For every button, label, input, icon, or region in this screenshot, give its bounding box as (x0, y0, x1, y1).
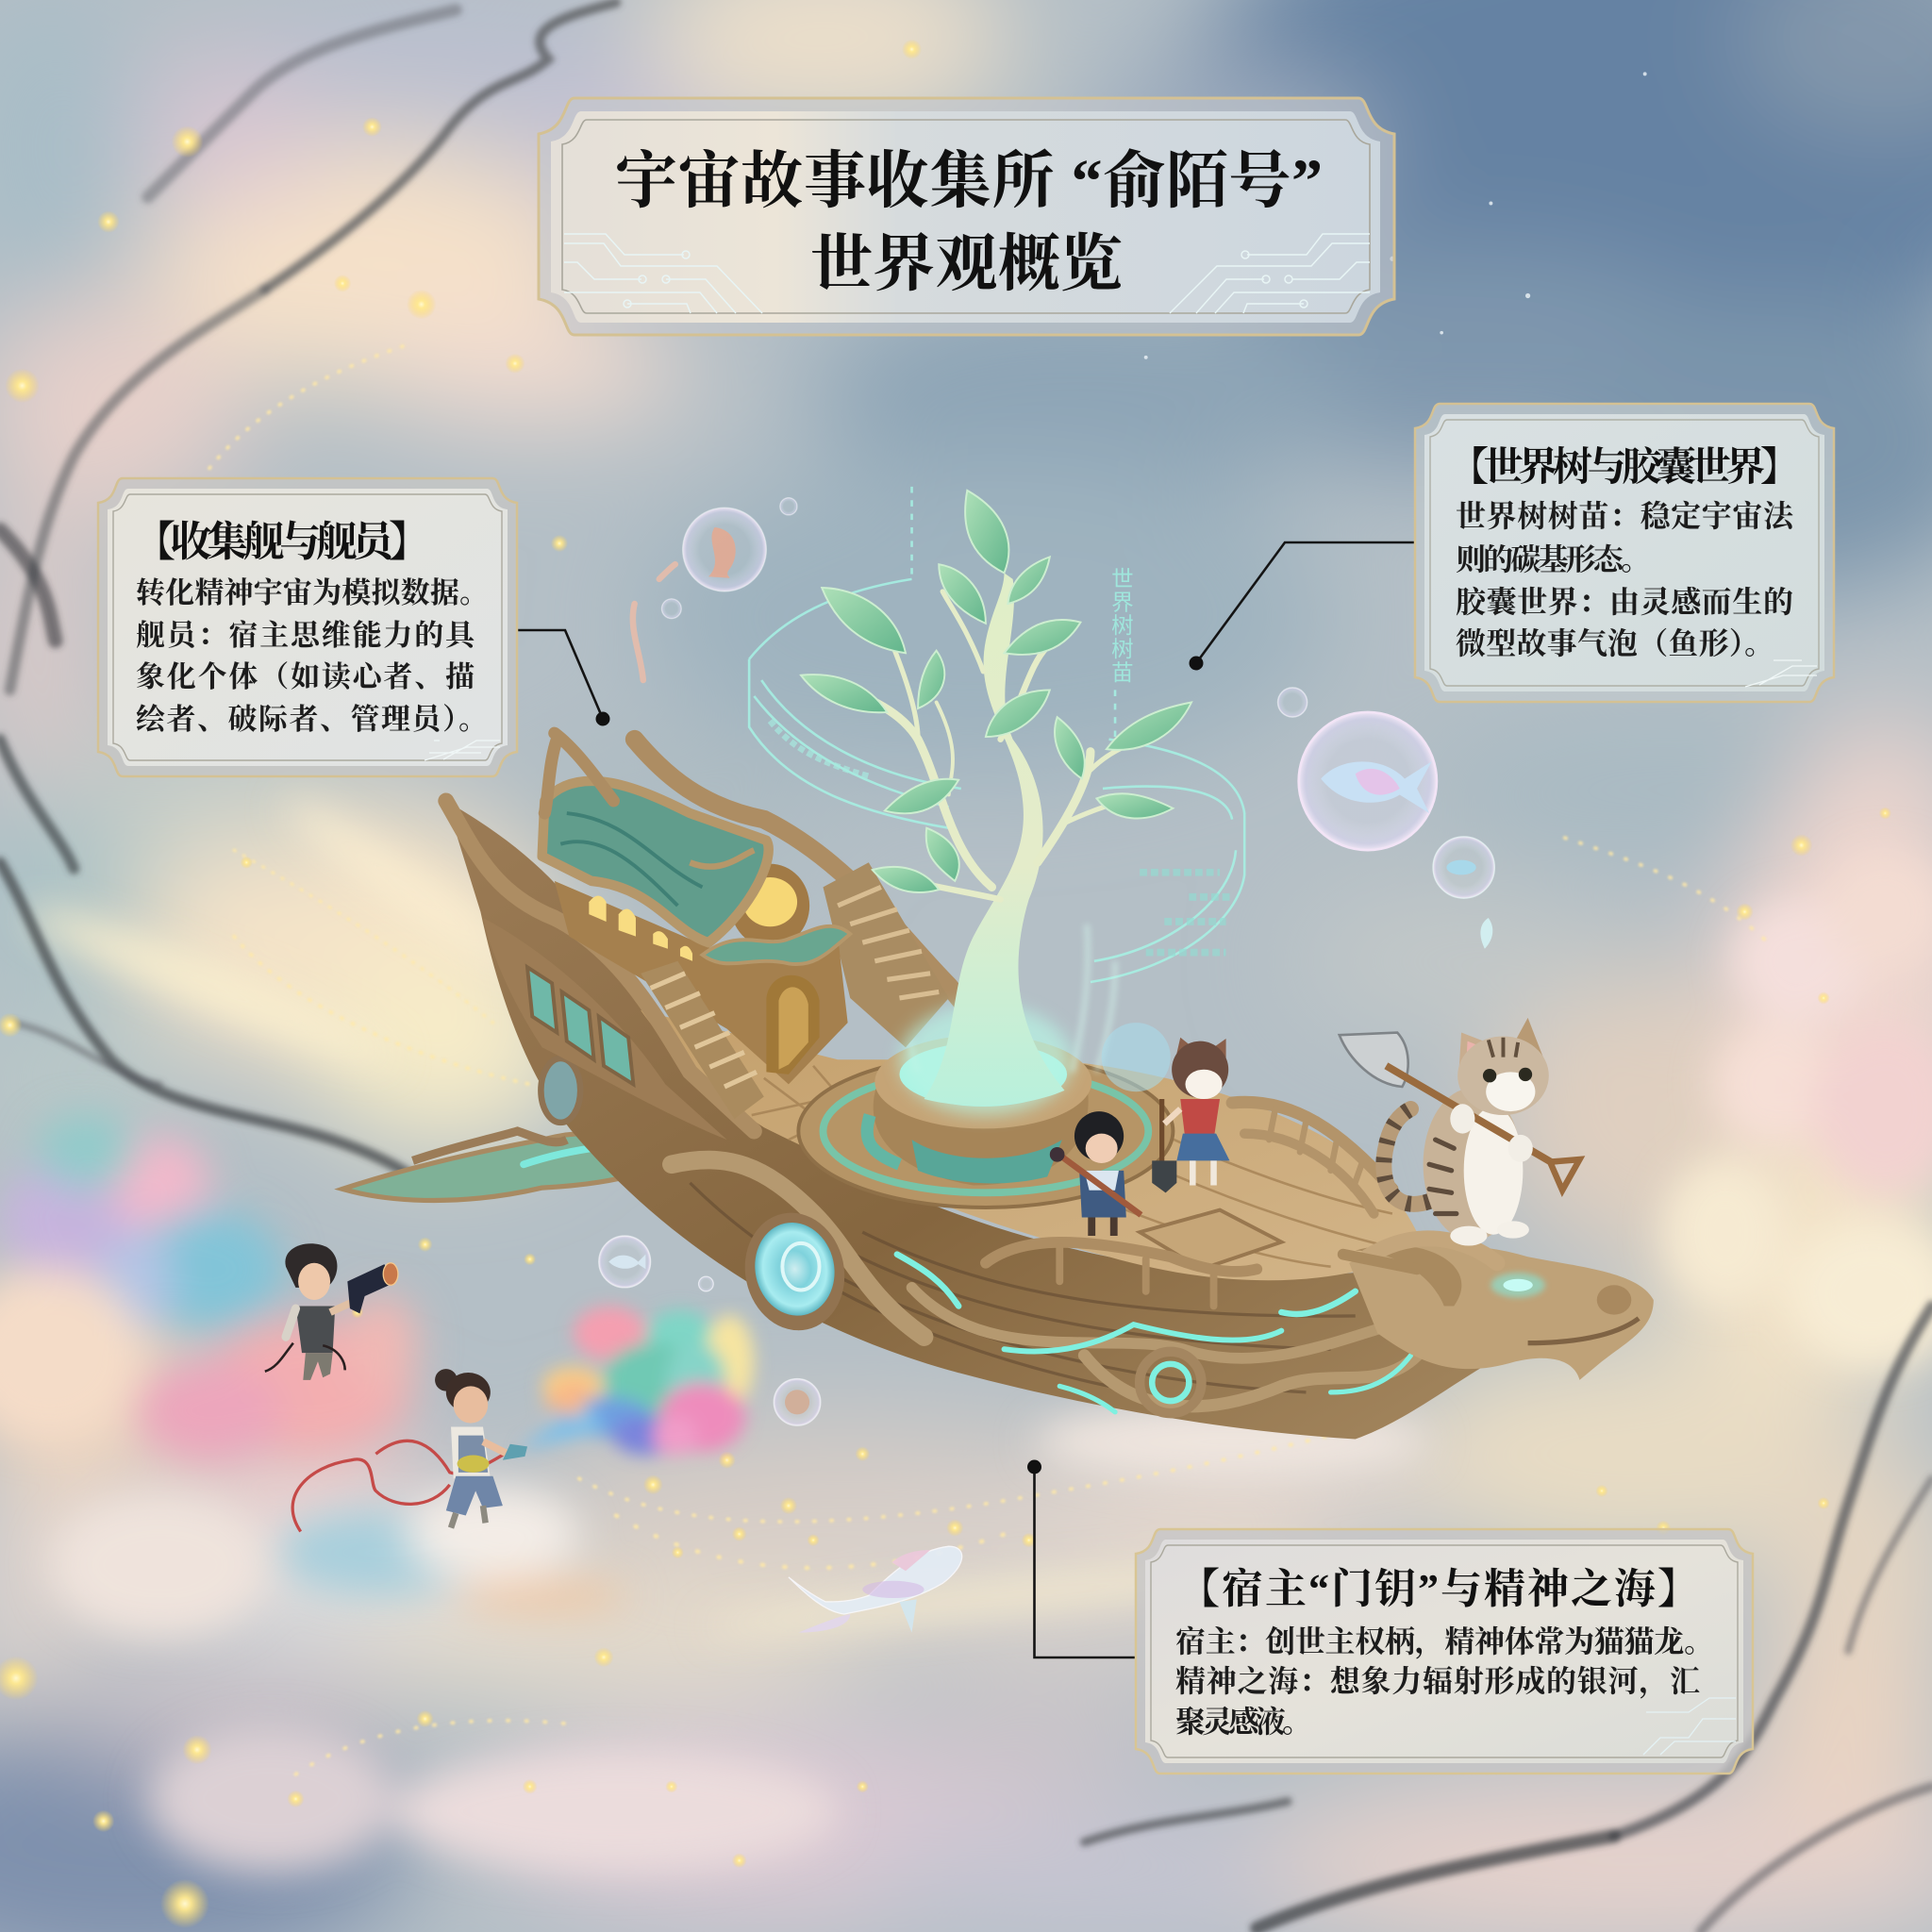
tail fin (342, 1131, 690, 1200)
body text (1456, 492, 1796, 663)
crew: boy with capture gun (265, 1243, 398, 1380)
body text: 聚灵感液。 (1175, 1698, 1312, 1741)
body text: 宿主：创世主权柄，精神体常为猫猫龙。 (1175, 1618, 1714, 1661)
body text (1175, 1618, 1714, 1741)
floating bubbles left (633, 498, 797, 680)
heading: 【宿主“门钥”与精神之海】 (1178, 1566, 1699, 1612)
glowing cyan veins (897, 1255, 1411, 1412)
golden dust trails (209, 345, 1774, 1774)
body text: 精神之海：想象力辐射形成的银河，汇 (1175, 1657, 1700, 1701)
frame (98, 478, 517, 776)
hull swirl emblem (1140, 1352, 1201, 1413)
porch roof (702, 926, 850, 964)
front rail (986, 1242, 1257, 1306)
body text (136, 569, 489, 738)
title plate (551, 111, 1380, 323)
title line one: 宇宙故事收集所 “俞陌号” (615, 147, 1323, 216)
stair left (641, 961, 764, 1119)
deck hatch (1140, 1210, 1281, 1269)
heading: 【世界树与胶囊世界】 (1449, 445, 1800, 490)
hull planks (690, 1183, 1356, 1392)
title line two: 世界观概览 (810, 230, 1123, 299)
hologram label: sapling: 世界树树苗 (1107, 567, 1139, 684)
rainbow smoke plume (518, 1306, 754, 1456)
lower bubbles (599, 1236, 821, 1425)
body text: 绘者、破际者、管理员）。 (136, 695, 488, 738)
plate (1424, 414, 1824, 691)
deck (641, 1010, 1417, 1280)
stern windows (527, 967, 633, 1084)
frame (1136, 1529, 1753, 1774)
cabin arched door (766, 975, 820, 1074)
cabin walls (555, 881, 848, 1084)
hologram rings with tree data (749, 487, 1244, 982)
bow rail (1232, 1102, 1392, 1214)
panel: host door key and sea of mind (1136, 1529, 1753, 1774)
title frame (539, 98, 1394, 335)
body text: 胶囊世界：由灵感而生的 (1456, 578, 1793, 622)
leaves (801, 491, 1191, 892)
upper rail horn (635, 740, 998, 1047)
plate (108, 489, 508, 766)
roof horn (544, 733, 613, 813)
title circuit traces (564, 234, 1370, 313)
body text: 转化精神宇宙为模拟数据。 (136, 569, 489, 611)
ghost fish (789, 1546, 962, 1633)
title panel (539, 98, 1394, 335)
crew: girl with rainbow sprayer (292, 1369, 527, 1532)
circuit corner (425, 741, 500, 760)
dragon figurehead (1343, 1239, 1654, 1380)
pedestal with glowing pool (798, 1035, 1173, 1208)
leader line: crew panel to ship (517, 630, 609, 726)
body text: 象化个体（如读心者、描 (136, 653, 475, 695)
plate (1145, 1540, 1743, 1763)
ship: flying wooden dragon ark (342, 491, 1654, 1440)
shovel (1340, 1033, 1579, 1191)
soft pastel puffs lower left (0, 789, 1932, 1873)
circuit corner (1745, 660, 1817, 687)
leader line: tree panel to sapling (1189, 542, 1415, 670)
stair right (823, 862, 949, 1047)
body text: 则的碳基形态。 (1456, 536, 1651, 579)
fish bubbles right (1277, 688, 1494, 949)
leader line: host panel to sea (1027, 1460, 1136, 1657)
circuit corner (1643, 1698, 1736, 1755)
rear orb small (541, 1058, 580, 1123)
cyan mist rising (908, 924, 1115, 1072)
panel: collector ship and crew (98, 478, 517, 776)
rear thruster orb (734, 1204, 856, 1340)
deck planks (752, 1066, 1392, 1267)
world tree sapling (801, 491, 1191, 1115)
hull (446, 801, 1528, 1440)
cabin windows (589, 896, 692, 961)
stern top rail (446, 801, 754, 1131)
glowing bubble behind deck (1102, 1023, 1171, 1091)
body text: 微型故事气泡（鱼形）。 (1456, 620, 1774, 663)
body text: 世界树树苗：稳定宇宙法 (1456, 492, 1796, 536)
stern wall (483, 918, 727, 1140)
twisting vines on hull (672, 1160, 1417, 1407)
body text: 舰员：宿主思维能力的具 (136, 611, 478, 654)
main teal roof (542, 781, 769, 942)
cat spirit with shovel (1340, 1018, 1579, 1245)
cabin round window (731, 864, 809, 947)
small dark-haired crew with brush (1050, 1111, 1141, 1236)
heading: 【收集舰与舰员】 (134, 519, 430, 565)
distant white stars (1144, 72, 1647, 359)
small cat-eared crew with spade (1152, 1038, 1230, 1192)
panel: world tree and capsule worlds (1415, 404, 1834, 702)
frame (1415, 404, 1834, 702)
